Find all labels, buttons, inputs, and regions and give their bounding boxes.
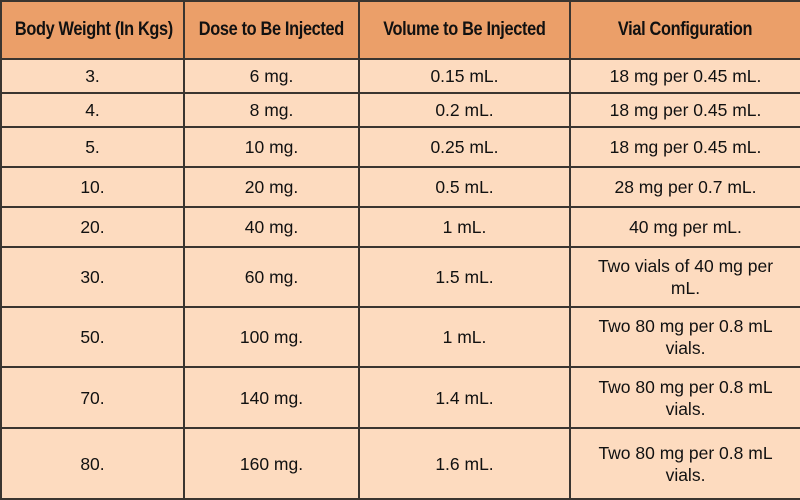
header row: mL. bbox=[671, 278, 700, 298]
header row: 30. bbox=[80, 267, 105, 287]
header row: Two 80 mg per 0.8 mL bbox=[598, 376, 773, 396]
header row: 10 mg. bbox=[245, 137, 298, 157]
header row: Volume to Be Injected bbox=[383, 19, 546, 40]
header row: 28 mg per 0.7 mL. bbox=[614, 177, 757, 197]
header row: 40 mg per mL. bbox=[629, 217, 742, 237]
header row: 160 mg. bbox=[240, 454, 303, 474]
header row: 3. bbox=[85, 66, 100, 86]
header row: 0.5 mL. bbox=[435, 177, 494, 197]
header row: 18 mg per 0.45 mL. bbox=[610, 137, 761, 157]
header row: Two 80 mg per 0.8 mL bbox=[598, 442, 773, 462]
header row: 18 mg per 0.45 mL. bbox=[610, 100, 761, 120]
header row: 140 mg. bbox=[240, 388, 303, 408]
header row: 0.15 mL. bbox=[430, 66, 499, 86]
header row: 5. bbox=[85, 137, 100, 157]
header row: 60 mg. bbox=[245, 267, 298, 287]
header row: Vial Configuration bbox=[618, 19, 753, 40]
header row: Two vials of 40 mg per bbox=[598, 256, 773, 276]
header row: vials. bbox=[666, 464, 705, 484]
header row: 0.25 mL. bbox=[430, 137, 499, 157]
header row: 20 mg. bbox=[245, 177, 298, 197]
header row: 100 mg. bbox=[240, 327, 303, 347]
header row: 10. bbox=[80, 177, 105, 197]
header row: 50. bbox=[80, 327, 105, 347]
header row: 1 mL. bbox=[443, 327, 486, 347]
header row: Dose to Be Injected bbox=[199, 19, 344, 40]
header row: 70. bbox=[80, 388, 105, 408]
header row: 6 mg. bbox=[250, 66, 293, 86]
header row: 0.2 mL. bbox=[435, 100, 494, 120]
header row: 20. bbox=[80, 217, 105, 237]
header row: 1.5 mL. bbox=[435, 267, 494, 287]
header row: vials. bbox=[666, 398, 705, 418]
header row: vials. bbox=[666, 338, 705, 358]
header row: Two 80 mg per 0.8 mL bbox=[598, 316, 773, 336]
header row: 80. bbox=[80, 454, 105, 474]
header row: 40 mg. bbox=[245, 217, 298, 237]
header row: 18 mg per 0.45 mL. bbox=[610, 66, 761, 86]
header row: 1.4 mL. bbox=[435, 388, 494, 408]
header row: 4. bbox=[85, 100, 100, 120]
header row: 1.6 mL. bbox=[435, 454, 494, 474]
header row: 8 mg. bbox=[250, 100, 293, 120]
header row: 1 mL. bbox=[443, 217, 486, 237]
header row: Body Weight (In Kgs) bbox=[15, 19, 173, 40]
